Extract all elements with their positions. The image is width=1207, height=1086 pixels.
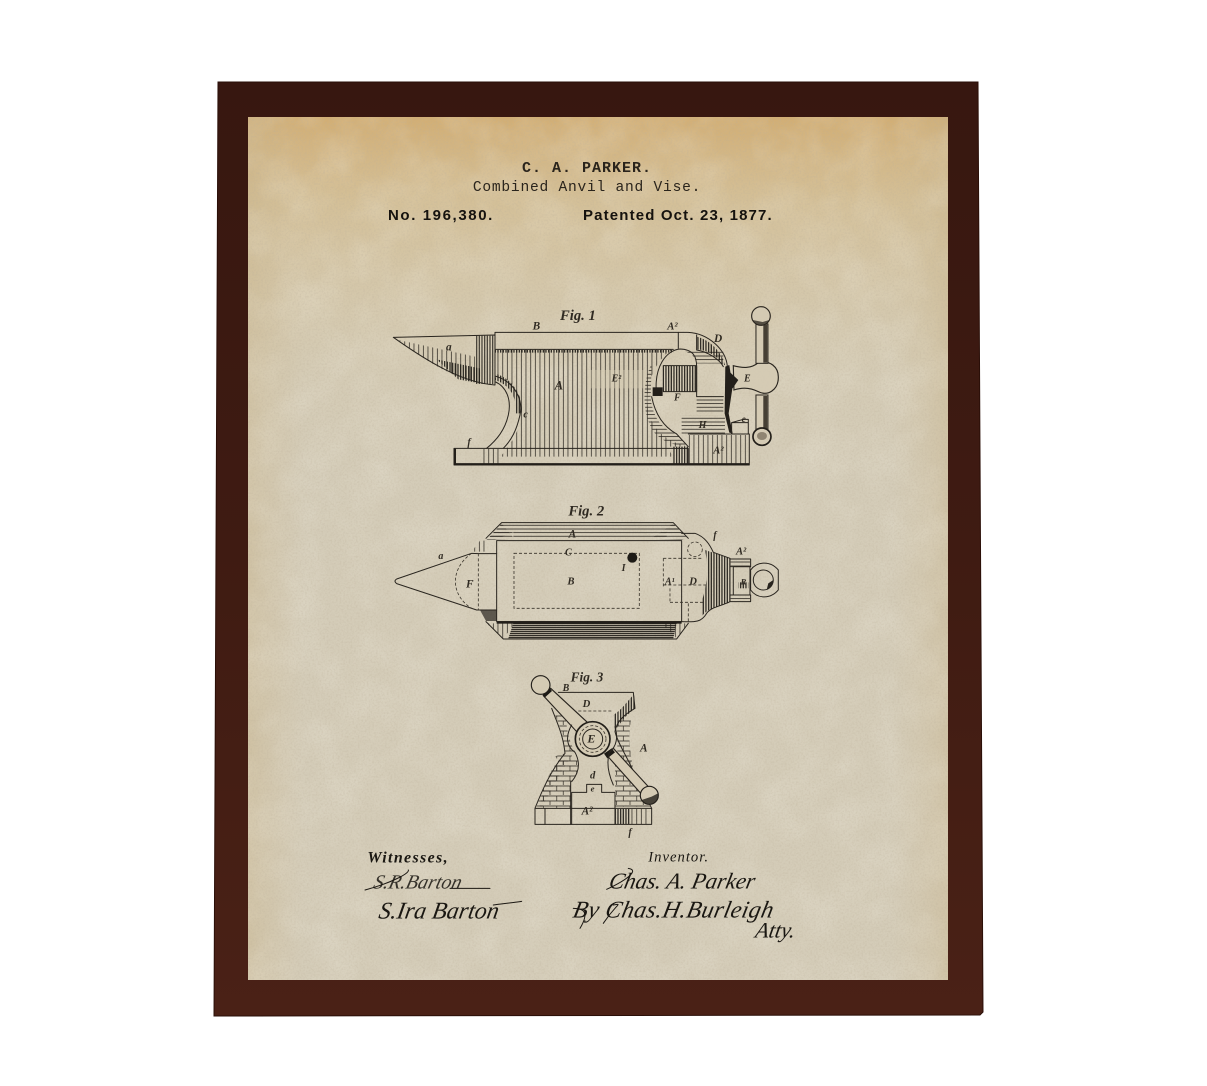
fig 1 part letters: a [446,342,452,354]
fig 1 part letters: e [742,415,746,425]
witness signature 1 [365,870,490,894]
figure 1: side view [393,307,778,465]
patent date: Patented Oct. 23, 1877. [583,207,773,224]
fig 1 heading: Fig. 1 [559,308,596,324]
attorney signature: By Chas.H.Burleigh [571,897,776,923]
fig 3 part letters: B [562,683,570,694]
fig 3 part letters: d [590,770,596,781]
fig 1 part letters: B [532,320,541,332]
vise arm [678,332,748,434]
screw eye [730,559,778,602]
fig 1 part letters: D [713,333,722,345]
figure 3: end view [531,670,658,839]
fig 3 part letters: A [639,743,648,755]
fig 3 part letters: e [591,784,595,794]
handle and screw hub [729,307,778,445]
figure 2: top view [395,504,778,639]
fig 2 part letters: A¹ [664,576,675,587]
fig 3 part letters: D [582,699,591,710]
heel and shoulder [663,533,730,622]
frame [214,82,983,1016]
anvil end body [535,692,652,824]
anvil body [487,332,688,457]
fig 3 part letters: E [586,731,595,745]
screw hub E [568,722,617,785]
fig 1 part letters: E [743,373,751,384]
fig 2 part letters [438,529,747,591]
fig 2 part letters: R [740,576,747,586]
fig 3 part letters [562,683,648,839]
fig 2 part letters: B [566,576,574,587]
fig 2 part letters: f [713,530,718,541]
title: inventor name: C. A. PARKER. [522,160,652,177]
header [388,160,773,224]
fig 3 part letters: f [628,828,633,839]
hardie outline and hole [514,553,639,608]
fig 2 part letters: F [465,579,474,591]
base [454,434,749,465]
horn [393,335,495,385]
signatures [365,849,798,942]
fig 1 part letters: f [467,437,472,448]
fig 1 part letters: c [523,409,528,420]
paper [248,117,948,980]
fig 1 part letters [446,320,751,456]
fig 2 part letters: C [565,548,572,559]
fig 2 part letters: A [568,529,577,541]
witness signature 1: S.R.Barton [371,872,464,894]
fig 2 part letters: A² [735,546,747,557]
patent number: No. 196,380. [388,207,494,224]
inventor heading: Inventor. [647,849,709,865]
fig 2 part letters: I [621,563,627,574]
anvil face [497,541,682,622]
throat and screw [645,349,725,447]
fig 2 part letters: D [688,576,697,587]
attorney abbreviation: Atty. [752,917,798,942]
fig 1 part letters: A² [712,445,724,456]
subtitle: invention: Combined Anvil and Vise. [473,180,701,196]
fig 2 heading: Fig. 2 [567,504,604,520]
handle bar [531,676,658,804]
fig 1 part letters: A [554,378,563,392]
fig 2 part letters: a [438,551,443,562]
fig 1 part letters: E² [611,374,622,385]
horn [395,541,497,621]
fig 1 part letters: F [673,393,681,404]
inventor signature: Chas. A. Parker [607,869,758,893]
vise block step [572,784,615,824]
fig 1 part letters: H [698,420,708,431]
outer octagon body [486,523,688,639]
fig 1 part letters: A² [666,321,678,332]
fig 3 part letters: A² [581,805,593,817]
witness signature 2: S.Ira Barton [377,897,501,924]
witnesses heading: Witnesses, [367,850,449,867]
fig 3 heading: Fig. 3 [570,670,604,685]
